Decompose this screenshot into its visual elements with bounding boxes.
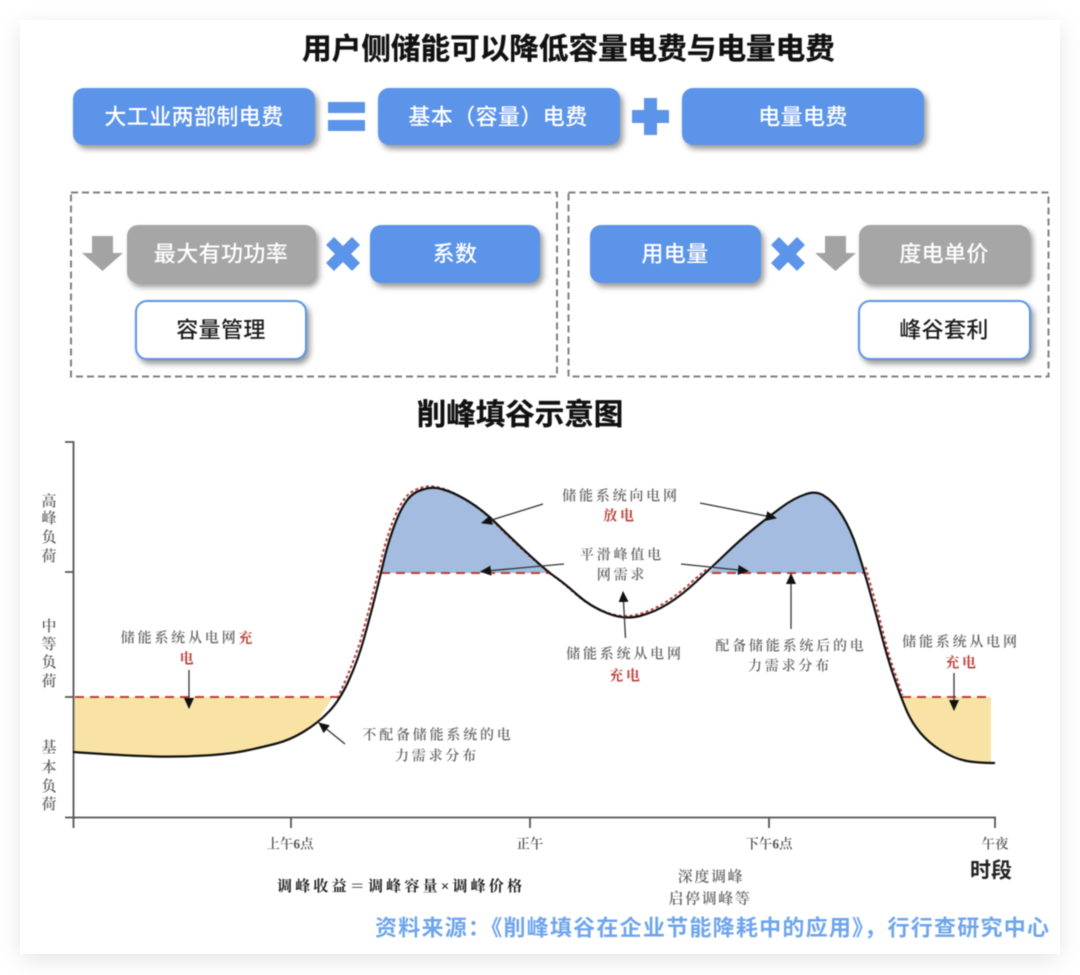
panel: energy fee <box>568 192 1048 376</box>
box: energy fee <box>682 88 924 145</box>
box: peak valley arbitrage: 峰谷套利 <box>899 318 989 342</box>
icon: equals <box>328 102 365 131</box>
annotation: smooth peak: 平滑峰值电 <box>580 546 664 564</box>
annotation: left charge: 电 <box>180 650 196 668</box>
chart heading: 削峰填谷示意图 <box>417 398 623 432</box>
box: capacity management: 容量管理 <box>176 318 266 342</box>
box: basic capacity fee <box>378 88 620 145</box>
annotation: left charge: 储能系统从电网充 <box>121 630 255 646</box>
annotation: with storage curve: 力需求分布 <box>748 658 832 674</box>
panel: capacity fee <box>71 192 557 376</box>
y axis label: base load: 负 <box>41 777 57 795</box>
annotation: right charge: 储能系统从电网 <box>902 634 1020 650</box>
icon: multiply <box>771 237 805 271</box>
source: 资料来源：《削峰填谷在企业节能降耗中的应用》，行行查研究中心 <box>375 916 1049 940</box>
box: coefficient <box>370 225 540 283</box>
y axis label: peak load: 高 <box>41 493 57 510</box>
formula row <box>73 88 924 145</box>
annotation: with storage curve: 配备储能系统后的电 <box>715 638 867 654</box>
annotation: smooth peak: 网需求 <box>597 566 647 584</box>
annotation: no storage curve: 力需求分布 <box>395 748 479 764</box>
annotation: no storage curve: 不配备储能系统的电 <box>362 726 514 744</box>
y axis label: peak load: 峰 <box>41 510 57 527</box>
box: electricity usage <box>590 225 761 283</box>
annotation: middle charge: 储能系统从电网 <box>566 646 684 662</box>
box: unit price <box>859 225 1030 283</box>
area: left charging <box>73 697 333 757</box>
y axis label: peak load: 负 <box>41 528 57 546</box>
box: peak valley arbitrage <box>859 301 1030 359</box>
annotation: right charge <box>902 634 1020 672</box>
x axis labels: 正午 <box>516 836 544 852</box>
y axis label: base load: 基 <box>41 738 57 756</box>
y axis label: base load <box>41 738 57 813</box>
y axis label: base load: 荷 <box>41 795 57 813</box>
box: energy fee: 电量电费 <box>758 104 848 130</box>
y axis label: mid load <box>41 617 57 690</box>
annotation: discharge <box>562 488 680 524</box>
annotation: no storage curve <box>362 726 514 764</box>
icon: down arrow <box>815 236 856 271</box>
x axis labels: 下午6点 <box>745 836 794 852</box>
x axis labels: 午夜 <box>982 836 1009 852</box>
y axis label: peak load: 荷 <box>41 547 57 565</box>
x axis title: 时段 <box>970 858 1012 882</box>
y axis label: mid load: 等 <box>41 636 57 653</box>
annotation: right charge: 充电 <box>945 654 979 672</box>
area: right discharging <box>709 493 865 573</box>
box: coefficient: 系数 <box>433 242 477 266</box>
icon: plus <box>632 98 669 135</box>
box: max active power <box>127 225 316 283</box>
area: right charging <box>902 697 991 763</box>
note: deep peak regulation: 深度调峰 <box>678 868 744 886</box>
y axis label: mid load: 中 <box>41 617 57 635</box>
box: basic capacity fee: 基本（容量）电费 <box>408 104 588 130</box>
box: electricity usage: 用电量 <box>641 242 709 266</box>
annotation: discharge: 储能系统向电网 <box>562 488 680 504</box>
x axis labels: 上午6点 <box>266 836 315 852</box>
arrows <box>189 503 954 744</box>
box: two-part tariff: 大工业两部制电费 <box>104 104 284 130</box>
box: unit price: 度电单价 <box>899 242 989 266</box>
icon: multiply <box>326 237 360 271</box>
formula: peak revenue: 调峰收益＝调峰容量×调峰价格 <box>277 877 522 895</box>
y axis label: mid load: 负 <box>41 653 57 671</box>
box: max active power: 最大有功功率 <box>154 242 288 266</box>
title: 用户侧储能可以降低容量电费与电量电费 <box>302 33 835 66</box>
annotation: with storage curve <box>715 638 867 674</box>
line: load without storage <box>73 488 995 763</box>
annotation: left charge <box>121 630 255 668</box>
y axis label: peak load <box>41 493 57 565</box>
x axis labels <box>266 836 1009 852</box>
y axis label: base load: 本 <box>41 758 57 776</box>
note: deep peak regulation: 启停调峰等 <box>668 890 752 908</box>
box: two-part tariff <box>73 88 315 145</box>
annotation: middle charge: 充电 <box>609 668 643 684</box>
axes <box>65 442 996 828</box>
icon: down arrow <box>82 236 123 271</box>
area: left discharging <box>380 488 549 573</box>
note: deep peak regulation <box>668 868 752 908</box>
annotation: discharge: 放电 <box>603 508 637 524</box>
annotation: smooth peak <box>580 546 664 584</box>
line: load after storage <box>75 486 992 698</box>
chart: peak shaving and valley filling <box>41 442 1020 882</box>
box: capacity management <box>136 301 306 359</box>
y axis label: mid load: 荷 <box>41 672 57 690</box>
annotation: middle charge <box>566 646 684 684</box>
